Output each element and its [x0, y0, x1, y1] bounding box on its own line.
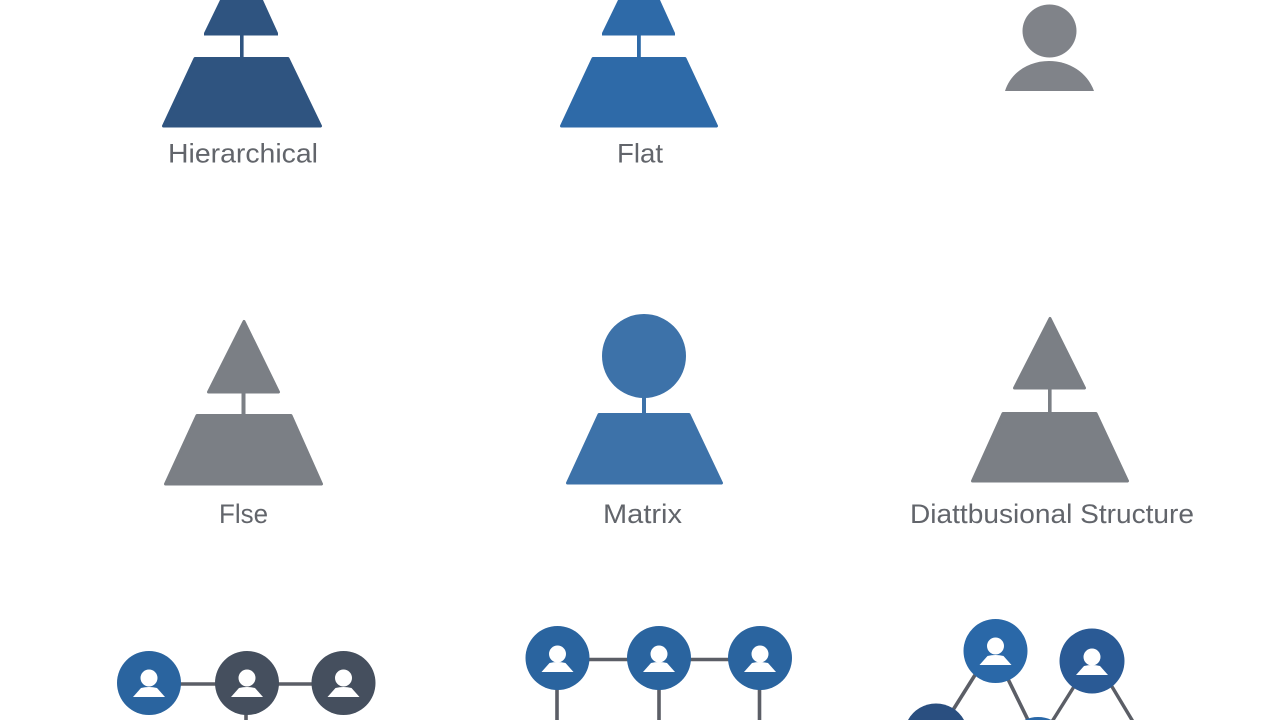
icon: gray pyramid right: [972, 318, 1128, 481]
connectors: [953, 675, 975, 710]
label: Matrix: Matrix: [603, 499, 683, 529]
node: dark person centre: [215, 651, 279, 715]
label: Flat: Flat: [617, 138, 664, 168]
icon: gray pyramid left: [166, 322, 322, 484]
node: upper right person: [1060, 628, 1124, 694]
node: top person: [964, 619, 1028, 683]
label: Flse: Flse: [219, 499, 268, 529]
node: lower left partial: [908, 703, 964, 720]
panel: flat: [562, 0, 716, 168]
label: Diattbusional Structure: Diattbusional Structure: [910, 499, 1194, 529]
node: right person: [728, 626, 792, 690]
network: bottom right: [908, 619, 1134, 720]
icon: gray person: [1005, 4, 1094, 91]
connectors: [557, 660, 760, 720]
panel: hierarchical: [164, 0, 320, 168]
node: centre person: [627, 626, 691, 690]
icon: flat pyramid: [562, 0, 716, 126]
network: bottom left: [117, 651, 376, 720]
node: left person: [526, 626, 590, 690]
label: Hierarchical: Hierarchical: [168, 138, 318, 168]
network: bottom centre: [526, 626, 792, 720]
connectors: [175, 684, 320, 720]
panel: flse: [166, 322, 322, 529]
node: dark person right: [312, 651, 376, 715]
node: lower centre partial: [1024, 717, 1052, 720]
icon: hierarchical pyramid: [164, 0, 320, 126]
panel: matrix: [568, 314, 722, 529]
icon: circle over trapezoid: [568, 314, 722, 483]
panel: distributional structure: [910, 318, 1194, 529]
node: blue person: [117, 651, 181, 715]
